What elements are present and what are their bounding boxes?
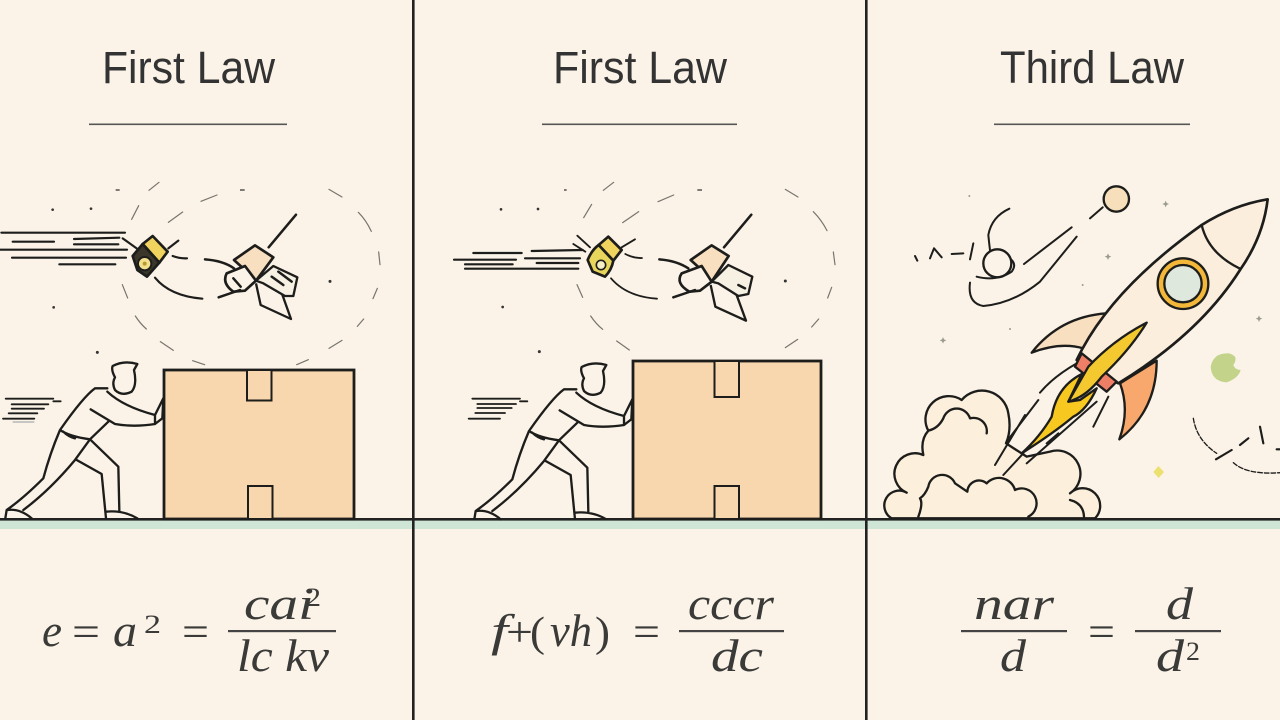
- equation: [961, 579, 1221, 681]
- panel: first law A: [0, 42, 380, 681]
- nozzle band: [1075, 353, 1117, 392]
- equation: =: [72, 610, 100, 656]
- equation: e: [42, 606, 62, 656]
- equation: +: [506, 610, 533, 656]
- equation: lc kv: [237, 631, 329, 681]
- speed lines: [0, 233, 127, 264]
- heading: Third Law: Third Law: [1000, 42, 1184, 93]
- panel: first law B: [454, 42, 835, 681]
- equation: (: [530, 610, 545, 656]
- equation: =: [182, 610, 209, 656]
- dashed orbit: [51, 182, 380, 365]
- sparkles: [940, 195, 1262, 344]
- equation: 2: [306, 583, 321, 612]
- panel: third law: [884, 42, 1280, 681]
- orbit illustration: [454, 182, 835, 353]
- equation: 2: [1186, 637, 1200, 666]
- equation: d: [1166, 579, 1194, 629]
- nose line: [1202, 225, 1240, 269]
- small planet and trail: [915, 186, 1129, 306]
- equation: d: [1000, 631, 1027, 681]
- heading rule: [542, 124, 737, 125]
- equation: nar: [974, 579, 1055, 629]
- dashed orbit: [500, 182, 835, 353]
- heading rule: [89, 124, 287, 125]
- equation: [491, 579, 784, 681]
- person pushing: [5, 362, 163, 518]
- person pushing: [474, 363, 632, 519]
- scribble marks: [1193, 418, 1280, 473]
- large satellite: [659, 215, 752, 321]
- equation: vh: [550, 606, 592, 656]
- motion trails: [995, 363, 1108, 475]
- cloud of exhaust: [884, 391, 1100, 518]
- small satellite: [573, 236, 657, 299]
- equation: ): [595, 610, 610, 656]
- push motion lines: [3, 399, 61, 422]
- green planet: [1211, 353, 1241, 382]
- equation: a: [113, 606, 137, 656]
- equation: cai: [244, 579, 314, 629]
- porthole: [1158, 258, 1208, 309]
- equation: f: [491, 606, 515, 656]
- box: [164, 370, 354, 519]
- equation: dc: [711, 631, 763, 681]
- rocket illustration: [884, 186, 1280, 518]
- rocket fins: [1032, 313, 1157, 439]
- flame: [1022, 323, 1147, 453]
- rocket body: [1077, 199, 1268, 383]
- speed lines: [454, 250, 583, 269]
- orbit illustration: [0, 182, 380, 365]
- push motion lines: [469, 399, 527, 419]
- panel dividers: [412, 0, 868, 720]
- heading: First Law: First Law: [102, 42, 275, 93]
- equation: =: [1088, 610, 1115, 656]
- equation: d: [1156, 631, 1185, 681]
- small satellite: [123, 236, 202, 299]
- box: [633, 361, 821, 519]
- equation: cccr: [688, 579, 775, 629]
- heading rule: [994, 124, 1190, 125]
- equation: =: [633, 610, 660, 656]
- ground band: [0, 518, 1280, 529]
- diamond: [1153, 466, 1164, 478]
- large satellite: [205, 215, 297, 319]
- equation: 2: [144, 610, 161, 639]
- heading: First Law: First Law: [553, 42, 727, 93]
- equation: [42, 579, 336, 681]
